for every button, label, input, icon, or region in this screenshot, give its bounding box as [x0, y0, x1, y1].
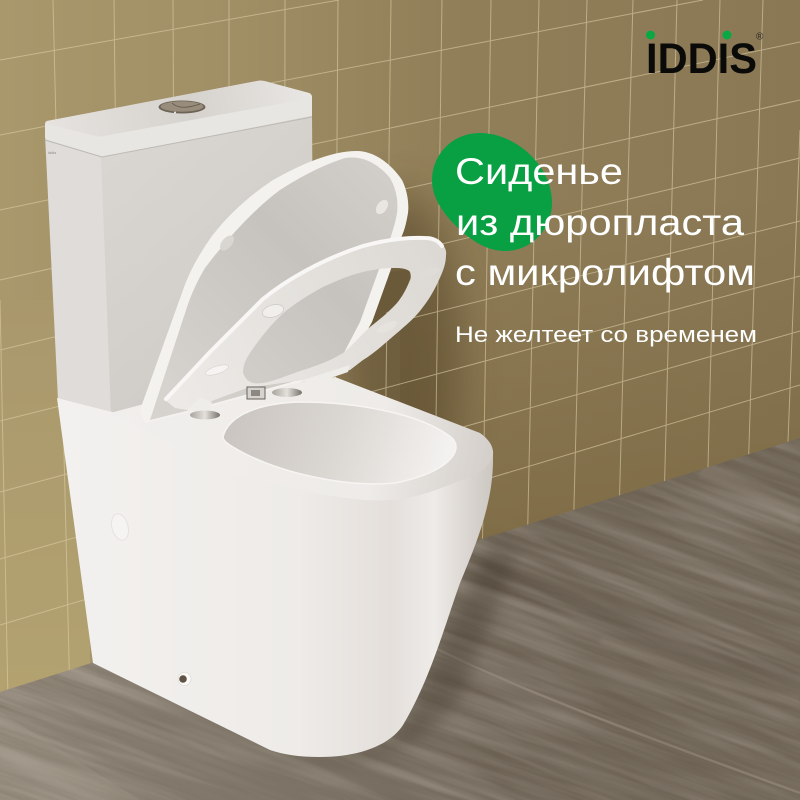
wall seen through ring — [371, 270, 411, 326]
hinge covers — [187, 365, 350, 413]
bowl side surface — [57, 398, 493, 757]
side plug — [109, 512, 131, 542]
ring bumper right — [417, 265, 441, 281]
ring highlight — [166, 238, 442, 399]
logo: IDDIS: ® — [756, 32, 764, 42]
subheading: Не желтеет со временем — [455, 322, 757, 347]
toilet seat lid — [140, 151, 408, 423]
headline: из дюропласта — [456, 201, 744, 243]
lid bumper upper right — [373, 198, 391, 216]
toilet cistern — [45, 81, 314, 420]
ring body — [165, 238, 446, 410]
cistern side face — [45, 135, 112, 415]
lid seam — [45, 117, 312, 157]
hinges — [190, 387, 302, 420]
hinge left chrome — [190, 410, 220, 420]
bowl opening — [223, 402, 456, 484]
toilet shadow on floor — [93, 540, 520, 766]
bottom fixing hole — [178, 672, 191, 686]
headline: Сиденье — [455, 150, 623, 192]
headline — [455, 150, 755, 293]
green blob — [432, 133, 552, 251]
toilet seat ring — [165, 238, 446, 413]
logo: IDDIS: IDDIS — [646, 35, 757, 83]
hinge right chrome — [272, 388, 302, 397]
cistern front face — [101, 116, 314, 420]
floor — [0, 430, 800, 800]
ring bumper mid — [261, 302, 285, 320]
lid outer edge — [140, 151, 408, 423]
cistern lid upper surface — [46, 81, 312, 136]
toilet bowl — [57, 377, 493, 757]
small brand mark: iddis — [48, 150, 56, 155]
bowl rim — [110, 377, 493, 500]
ring bumper lower right — [375, 319, 399, 335]
flush button — [158, 100, 206, 114]
hinge mid box — [247, 387, 265, 399]
ring bumper lower — [204, 363, 230, 377]
cistern lid band — [45, 81, 312, 157]
lid bumper left — [217, 233, 237, 253]
lid inner panel — [150, 158, 397, 420]
headline: с микролифтом — [455, 251, 755, 293]
